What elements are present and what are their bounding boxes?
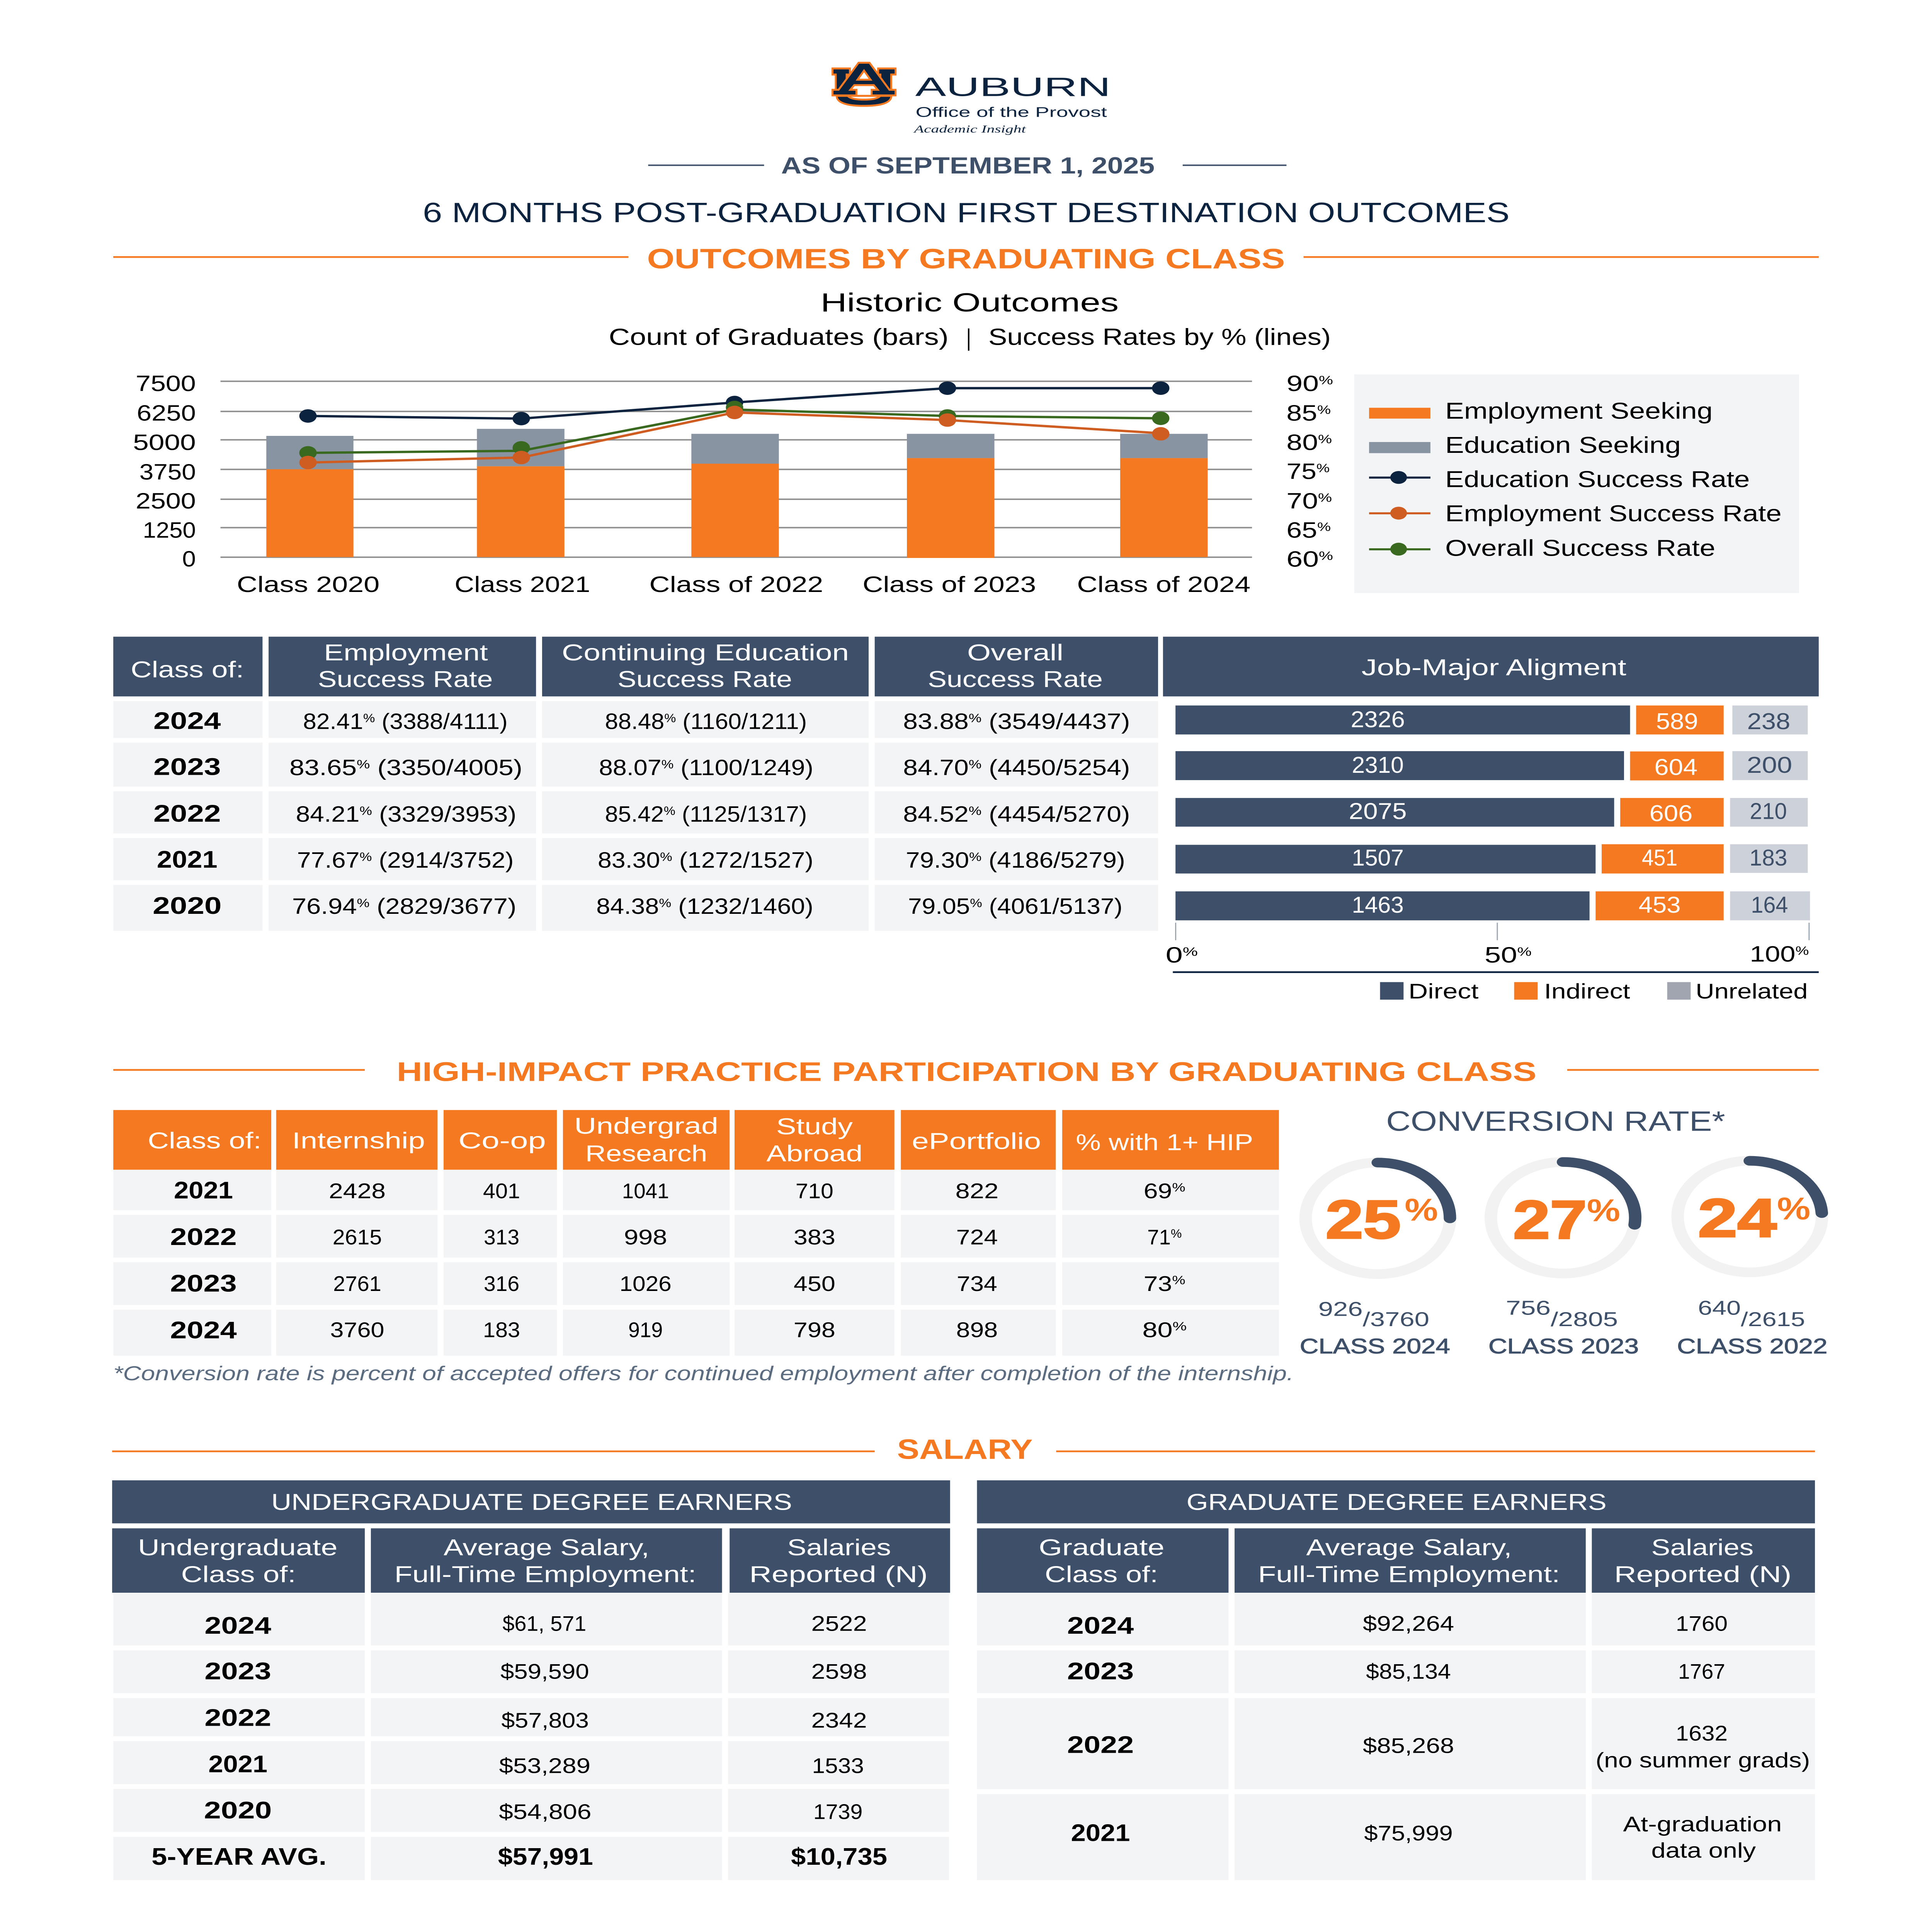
row 2024: 82.41 — [303, 709, 375, 734]
HIP row 2023: 316 — [484, 1272, 519, 1296]
data rows: $57,991 — [498, 1843, 593, 1870]
class label: CLASS 2024 — [1300, 1335, 1450, 1358]
HIP table header — [113, 1110, 1279, 1170]
job-major alignment stacked bars — [1166, 706, 1819, 1003]
date line — [648, 153, 1286, 179]
class label: CLASS 2023 — [1488, 1335, 1639, 1358]
data rows: 1760 — [1676, 1612, 1728, 1636]
percent axis — [1166, 923, 1819, 973]
bar 2020: 453 — [1639, 892, 1681, 918]
row 2023: (4450/5254) — [981, 755, 1130, 780]
row 2023 — [153, 753, 1130, 780]
fraction: 756 — [1506, 1297, 1549, 1319]
row 2022: (1125/1317) — [675, 802, 807, 827]
row 2024: % — [969, 711, 981, 725]
success rate table header: Continuing Education — [562, 640, 849, 665]
row 2024: % — [664, 711, 676, 725]
right axis labels: 70 — [1286, 489, 1318, 514]
column headers: Reported (N) — [1614, 1562, 1791, 1587]
data rows: $85,268 — [1363, 1734, 1454, 1757]
icon: AU monogram — [832, 63, 896, 106]
row 2021: % — [969, 850, 981, 864]
stacked bars — [266, 429, 1208, 558]
row 2020: % — [659, 896, 671, 910]
HIP row 2023: % — [1172, 1273, 1185, 1287]
row 2020: (2829/3677) — [369, 894, 516, 919]
fraction: /2615 — [1741, 1308, 1805, 1330]
row 2023: (1100/1249) — [673, 755, 813, 780]
HIP row 2021: % — [1172, 1180, 1185, 1194]
chart legend: Employment Seeking — [1445, 398, 1713, 423]
success rate table header: Success Rate — [617, 667, 792, 692]
data rows — [113, 1593, 949, 1880]
data rows: 2022 — [1067, 1731, 1134, 1758]
data rows: 2598 — [811, 1660, 867, 1684]
chart legend: Education Success Rate — [1445, 467, 1750, 492]
HIP row 2021: 2021 — [174, 1177, 233, 1204]
data rows: 2522 — [811, 1612, 867, 1636]
percent axis: % — [1517, 945, 1532, 958]
data rows: 2023 — [1067, 1658, 1134, 1685]
left axis labels: 3750 — [139, 460, 196, 485]
data rows: 1533 — [812, 1754, 864, 1778]
HIP row 2024: 898 — [956, 1318, 998, 1342]
bar 2021 — [1175, 844, 1808, 874]
HIP row 2022: 998 — [624, 1226, 667, 1249]
row 2021: 83.30 — [598, 848, 670, 872]
row 2021: (1272/1527) — [672, 848, 813, 872]
data rows: 2024 — [204, 1612, 271, 1639]
HIP row 2024: 2024 — [170, 1317, 237, 1344]
data rows: $59,590 — [500, 1660, 589, 1684]
banner — [112, 1480, 950, 1523]
data rows: (no summer grads) — [1595, 1749, 1810, 1772]
row 2024: 2024 — [153, 707, 221, 734]
right axis labels: 75 — [1286, 459, 1318, 484]
bar 2021: 451 — [1642, 845, 1677, 871]
left axis labels: 5000 — [133, 430, 196, 455]
row 2020 — [153, 893, 1122, 919]
footnote: *Conversion rate is percent of accepted offers for continued employment after completion of the internship. — [113, 1362, 1294, 1384]
column headers — [112, 1528, 950, 1593]
section heading: salary — [112, 1434, 1815, 1465]
section heading: outcomes by graduating class: OUTCOMES BY GRADUATING CLASS — [647, 243, 1285, 274]
HIP row 2021: 710 — [796, 1179, 833, 1203]
data rows: 5-YEAR AVG. — [151, 1843, 327, 1870]
HIP table header: Internship — [292, 1128, 425, 1153]
right axis labels: 80 — [1286, 430, 1318, 455]
column headers: Graduate — [1039, 1535, 1165, 1560]
panel: graduate salary table — [977, 1480, 1815, 1880]
success rate table header: Job-Major Aligment — [1362, 655, 1626, 680]
row 2024: % — [363, 711, 375, 725]
HIP row 2024: % — [1173, 1320, 1187, 1333]
chart legend — [1354, 374, 1799, 593]
success rate table header: Overall — [967, 640, 1063, 665]
data rows: $57,803 — [502, 1709, 589, 1732]
HIP row 2021: 69 — [1144, 1179, 1174, 1203]
HIP row 2021: 822 — [956, 1179, 998, 1203]
unit name: Academic Insight — [913, 123, 1027, 135]
left axis labels: 0 — [182, 547, 196, 571]
line: employment success rate — [299, 406, 1169, 469]
column headers: Average Salary, — [1306, 1535, 1512, 1560]
data rows: 1632 — [1676, 1722, 1728, 1745]
chart legend: Employment Success Rate — [1445, 501, 1782, 526]
data rows: $75,999 — [1364, 1821, 1453, 1845]
bar 2021: 183 — [1749, 845, 1787, 871]
HIP table header: ePortfolio — [912, 1129, 1041, 1154]
right axis labels: % — [1317, 520, 1331, 534]
row 2022 — [153, 800, 1130, 827]
x axis labels: Class of 2023 — [862, 572, 1036, 597]
HIP row 2024: 183 — [483, 1318, 520, 1342]
data rows: $61, 571 — [502, 1612, 586, 1636]
row 2024 — [153, 707, 1130, 734]
donut: class 2022: 24 — [1698, 1187, 1777, 1248]
HIP row 2024: 798 — [794, 1318, 835, 1342]
HIP row 2022: 724 — [956, 1226, 998, 1249]
left axis labels: 7500 — [136, 371, 196, 396]
section heading: salary: SALARY — [897, 1434, 1033, 1465]
row 2022: 2022 — [153, 800, 221, 827]
HIP table header: Study — [776, 1114, 853, 1139]
row 2024: (3549/4437) — [981, 709, 1130, 734]
data rows: 2021 — [1071, 1820, 1130, 1846]
office name: Office of the Provost — [916, 104, 1107, 120]
left axis labels — [133, 371, 196, 571]
fraction: 926 — [1318, 1298, 1361, 1320]
row 2020: (1232/1460) — [671, 894, 813, 919]
bar 2022: 606 — [1650, 801, 1692, 826]
data rows: $53,289 — [499, 1754, 590, 1778]
x axis labels — [237, 572, 1250, 597]
bar 2024: 589 — [1656, 709, 1698, 734]
right axis labels: % — [1318, 491, 1332, 504]
wordmark: AUBURN — [915, 72, 1111, 102]
bar 2023: 604 — [1654, 755, 1697, 780]
title: 6 MONTHS POST-GRADUATION FIRST DESTINATION OUTCOMES — [423, 197, 1510, 228]
row 2023: 83.65 — [289, 755, 361, 780]
HIP row 2024: 3760 — [330, 1318, 384, 1342]
bar 2023 — [1175, 751, 1808, 781]
HIP row 2024: 919 — [628, 1318, 663, 1342]
combo chart: historic outcomes — [133, 371, 1333, 597]
row 2021: 2021 — [157, 846, 218, 873]
bar 2024 — [1175, 706, 1808, 735]
data rows: data only — [1651, 1839, 1756, 1862]
bar 2020 — [1175, 891, 1810, 920]
row 2023: 84.70 — [903, 755, 975, 780]
percent axis: 0 — [1166, 943, 1182, 968]
HIP row 2023: 2023 — [170, 1270, 237, 1297]
HIP row 2024: 80 — [1142, 1318, 1173, 1342]
row 2020: % — [357, 896, 369, 910]
donut: class 2022: % — [1777, 1191, 1810, 1226]
success rate table header: Success Rate — [928, 667, 1103, 692]
row 2023: 88.07 — [599, 755, 671, 780]
bar 2022 — [1175, 798, 1808, 827]
data rows: $92,264 — [1363, 1612, 1454, 1636]
row 2020: 79.05 — [908, 894, 980, 919]
data rows: $54,806 — [499, 1800, 591, 1824]
percent axis: 50 — [1485, 943, 1517, 968]
chart subheading: Count of Graduates (bars) — [609, 324, 949, 350]
section heading: outcomes by graduating class — [113, 243, 1819, 274]
row 2020: % — [970, 896, 982, 910]
alignment legend — [1380, 980, 1808, 1003]
HIP row 2021 — [174, 1177, 1185, 1204]
row 2024: 83.88 — [903, 709, 975, 734]
success rate table header: Class of: — [131, 657, 244, 682]
chart heading: Historic Outcomes — [821, 288, 1119, 317]
right axis labels: 60 — [1286, 547, 1318, 572]
donut: class 2024: 25 — [1325, 1189, 1401, 1250]
column headers: Undergraduate — [138, 1535, 338, 1560]
HIP row 2022 — [170, 1224, 1182, 1250]
bar 2022: 2075 — [1349, 799, 1407, 824]
row 2021: % — [660, 850, 672, 864]
column headers: Full-Time Employment: — [1258, 1562, 1560, 1587]
row 2020: 2020 — [153, 893, 222, 919]
line: overall success rate — [299, 401, 1169, 459]
row 2020: 76.94 — [292, 894, 364, 919]
panel: undergraduate salary table — [112, 1480, 950, 1880]
conversion rate heading: CONVERSION RATE* — [1386, 1106, 1725, 1137]
column headers: Class of: — [181, 1562, 296, 1587]
left axis labels: 2500 — [136, 489, 196, 514]
row 2021 — [157, 846, 1125, 873]
HIP row 2022: 2022 — [170, 1224, 237, 1250]
row 2022: 85.42 — [605, 802, 677, 827]
bar 2023: 200 — [1747, 752, 1792, 778]
banner: GRADUATE DEGREE EARNERS — [1187, 1490, 1607, 1515]
section heading: high-impact practice participation: HIGH-IMPACT PRACTICE PARTICIPATION BY GRADUATING CLASS — [396, 1057, 1536, 1087]
success rate table rows — [113, 701, 1158, 931]
HIP row 2022: % — [1171, 1226, 1182, 1240]
row 2023: % — [662, 757, 673, 771]
HIP row 2022: 383 — [794, 1226, 835, 1249]
row 2022: (3329/3953) — [372, 802, 516, 827]
row 2024: (3388/4111) — [375, 709, 508, 734]
row 2022: % — [969, 804, 981, 818]
column headers: Reported (N) — [749, 1562, 928, 1587]
row 2024: 88.48 — [605, 709, 677, 734]
right axis labels: 85 — [1286, 401, 1318, 426]
fraction: /3760 — [1363, 1308, 1429, 1330]
donut: class 2024: % — [1405, 1192, 1438, 1228]
HIP table header: Abroad — [766, 1141, 862, 1166]
data rows: 1767 — [1678, 1660, 1725, 1684]
row 2022: % — [664, 804, 675, 818]
chart legend: Education Seeking — [1445, 432, 1681, 458]
data rows: 2342 — [811, 1709, 867, 1732]
row 2023: % — [357, 757, 370, 771]
row 2020: 84.38 — [596, 894, 668, 919]
HIP row 2023 — [170, 1270, 1185, 1297]
column headers: Salaries — [1651, 1535, 1753, 1560]
column headers — [977, 1528, 1815, 1593]
right axis labels: % — [1319, 373, 1333, 387]
data rows: 1739 — [813, 1800, 862, 1824]
chart subheading — [609, 324, 1331, 351]
success rate table header: Employment — [324, 640, 488, 665]
HIP table header: Co-op — [458, 1128, 546, 1153]
donut: class 2023: % — [1587, 1193, 1620, 1228]
percent axis: % — [1183, 945, 1198, 958]
HIP row 2023: 73 — [1144, 1272, 1174, 1296]
row 2022: % — [359, 804, 372, 818]
x axis labels: Class of 2024 — [1077, 572, 1250, 597]
column headers: Full-Time Employment: — [395, 1562, 696, 1587]
HIP table header: Class of: — [148, 1128, 261, 1153]
HIP row 2021: 401 — [483, 1179, 520, 1203]
percent axis: 100 — [1750, 942, 1798, 967]
column headers: Class of: — [1045, 1562, 1158, 1587]
data rows: 2020 — [204, 1797, 272, 1824]
HIP row 2023: 2761 — [333, 1272, 381, 1296]
row 2021: (2914/3752) — [372, 848, 514, 872]
right axis labels — [1286, 371, 1333, 572]
row 2023: 2023 — [153, 753, 221, 780]
HIP row 2022: 313 — [484, 1226, 519, 1249]
bar 2020: 164 — [1751, 892, 1788, 918]
HIP row 2023: 1026 — [619, 1272, 672, 1296]
right axis labels: % — [1319, 549, 1333, 563]
row 2020: (4061/5137) — [982, 894, 1122, 919]
row 2021: 79.30 — [906, 848, 978, 872]
bar 2023: 2310 — [1352, 752, 1404, 778]
left axis labels: 1250 — [143, 518, 196, 543]
HIP table rows — [113, 1170, 1279, 1355]
data rows: At-graduation — [1623, 1813, 1782, 1836]
data rows: 2023 — [204, 1658, 271, 1685]
chart legend: Overall Success Rate — [1445, 536, 1715, 561]
HIP row 2023: 734 — [957, 1272, 997, 1296]
fraction: /2805 — [1551, 1308, 1618, 1330]
banner — [977, 1480, 1815, 1523]
header logo: Auburn Office of the Provost — [832, 63, 1111, 135]
row 2022: (4454/5270) — [981, 802, 1130, 827]
x axis labels: Class 2021 — [454, 572, 590, 597]
percent axis: % — [1796, 944, 1809, 957]
right axis labels: % — [1317, 403, 1331, 417]
HIP table header: Research — [585, 1141, 707, 1166]
bar 2024: 238 — [1747, 709, 1790, 734]
HIP row 2021: 2428 — [329, 1179, 386, 1203]
data rows: 2021 — [208, 1751, 267, 1777]
data rows: $85,134 — [1366, 1660, 1451, 1684]
donut: class 2023: 27 — [1513, 1189, 1587, 1250]
success rate table header: Success Rate — [318, 667, 493, 692]
data rows — [977, 1593, 1815, 1880]
HIP row 2023: 450 — [794, 1272, 835, 1296]
fraction: 640 — [1698, 1297, 1741, 1319]
HIP row 2022: 71 — [1147, 1226, 1178, 1249]
row 2024: (1160/1211) — [676, 709, 807, 734]
row 2023: (3350/4005) — [370, 755, 522, 780]
section heading: high-impact practice participation — [113, 1057, 1819, 1087]
HIP row 2022: 2615 — [333, 1226, 382, 1249]
HIP row 2021: 1041 — [622, 1179, 669, 1203]
bar 2022: 210 — [1750, 799, 1787, 824]
x axis labels: Class 2020 — [237, 572, 379, 597]
column headers: Average Salary, — [444, 1535, 649, 1560]
row 2021: % — [360, 850, 372, 864]
bar 2024: 2326 — [1351, 707, 1405, 732]
data rows: $10,735 — [791, 1843, 887, 1870]
class label: CLASS 2022 — [1677, 1335, 1827, 1358]
column headers: Salaries — [787, 1535, 891, 1560]
donut: class 2023 — [1488, 1162, 1639, 1358]
right axis labels: % — [1318, 432, 1332, 446]
row 2021: 77.67 — [297, 848, 369, 872]
row 2021: (4186/5279) — [981, 848, 1125, 872]
right axis labels: 90 — [1286, 371, 1318, 396]
HIP table header: % with 1+ HIP — [1076, 1130, 1253, 1155]
row 2023: % — [969, 757, 981, 771]
alignment legend: Indirect — [1544, 980, 1630, 1003]
success rate table header — [113, 637, 1819, 696]
chart subheading: Success Rates by % (lines) — [988, 324, 1331, 350]
right axis labels: 65 — [1286, 518, 1318, 543]
donut: class 2024 — [1300, 1163, 1450, 1358]
bar 2021: 1507 — [1352, 845, 1404, 871]
row 2022: 84.21 — [296, 802, 368, 827]
alignment legend: Direct — [1408, 980, 1479, 1003]
line: education success rate — [299, 381, 1169, 425]
alignment legend: Unrelated — [1696, 980, 1808, 1003]
donut: class 2022 — [1677, 1161, 1827, 1358]
banner: UNDERGRADUATE DEGREE EARNERS — [271, 1490, 792, 1515]
HIP table header: Undergrad — [574, 1113, 718, 1139]
HIP row 2024 — [170, 1317, 1187, 1344]
data rows: 2022 — [204, 1704, 271, 1731]
date line: AS OF SEPTEMBER 1, 2025 — [781, 153, 1155, 179]
row 2022: 84.52 — [903, 802, 975, 827]
data rows: 2024 — [1067, 1612, 1134, 1639]
x axis labels: Class of 2022 — [649, 572, 823, 597]
left axis labels: 6250 — [137, 401, 196, 426]
right axis labels: % — [1316, 461, 1330, 475]
bar 2020: 1463 — [1352, 892, 1404, 918]
